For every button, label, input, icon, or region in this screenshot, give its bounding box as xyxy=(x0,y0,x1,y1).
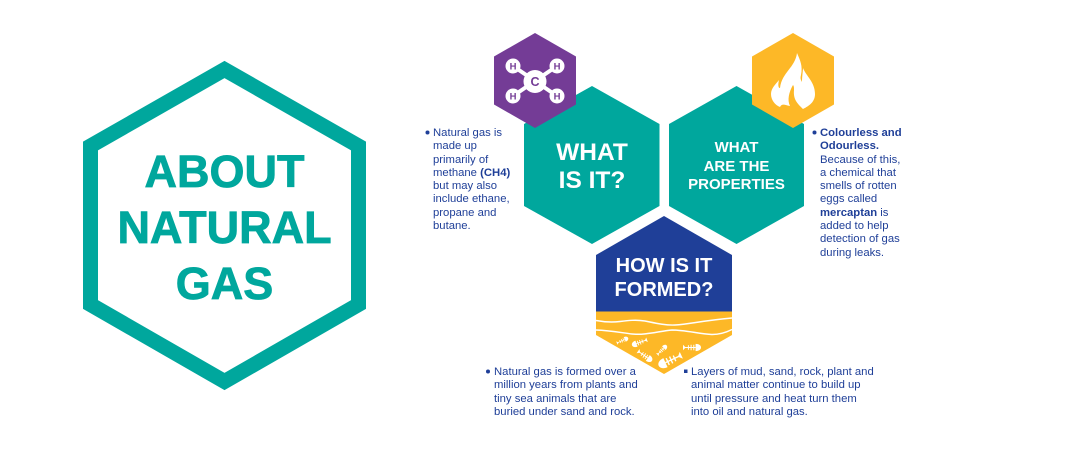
icon: methane molecule: H xyxy=(554,62,561,72)
text block: how formed right: until pressure and heat turn them xyxy=(691,393,857,405)
text block: properties: Odourless. xyxy=(820,140,879,152)
heading: properties: PROPERTIES xyxy=(688,176,785,193)
icon: methane molecule xyxy=(494,33,576,128)
text block: how formed left xyxy=(486,366,638,418)
text block: how formed left: tiny sea animals that are xyxy=(494,393,616,405)
text block: what is it: but may also xyxy=(433,180,497,192)
text block: how formed right: into oil and natural gas. xyxy=(691,406,808,418)
text block: properties: Because of this, xyxy=(820,154,900,166)
text block: properties: detection of gas xyxy=(820,233,900,245)
text block: properties: a chemical that xyxy=(820,167,897,179)
text block: what is it: include ethane, xyxy=(433,193,510,205)
icon: methane molecule: H xyxy=(554,92,561,102)
heading: what is it: WHAT xyxy=(556,139,628,166)
title: GAS xyxy=(176,258,273,309)
icon: methane molecule: C xyxy=(530,75,540,89)
text block: how formed left: buried under sand and rock. xyxy=(494,406,635,418)
title: NATURAL xyxy=(117,202,332,253)
text block: how formed right: Layers of mud, sand, rock, plant and xyxy=(691,366,874,378)
text block: how formed left: Natural gas is formed over a xyxy=(494,366,637,378)
text block: how formed right: animal matter continue to build up xyxy=(691,379,861,391)
text block: properties: during leaks. xyxy=(820,247,884,259)
text block: properties: eggs called xyxy=(820,193,877,205)
icon: methane molecule: H xyxy=(510,62,517,72)
icon: flame xyxy=(752,33,834,128)
text block: properties: Colourless and xyxy=(820,127,902,139)
text block: properties: is xyxy=(877,207,889,219)
heading: properties: WHAT xyxy=(715,139,758,156)
icon: methane molecule: H xyxy=(510,92,517,102)
text block: what is it: methane (CH4) xyxy=(433,167,510,179)
heading: how is it formed: HOW IS IT xyxy=(616,255,712,277)
text block: properties: added to help xyxy=(820,220,888,232)
text block: what is it: primarily of xyxy=(433,154,489,166)
panel: what is it hexagon xyxy=(524,86,660,244)
heading: what is it: IS IT? xyxy=(559,167,625,194)
panel: how is it formed hexagon xyxy=(596,216,732,374)
panel: properties hexagon xyxy=(669,86,804,244)
text block: what is it: Natural gas is xyxy=(433,127,502,139)
heading: properties: ARE THE xyxy=(704,158,769,175)
text block: what is it xyxy=(426,127,510,232)
text block: how formed left: million years from plants and xyxy=(494,379,638,391)
text block: what is it: butane. xyxy=(433,220,471,232)
heading: how is it formed: FORMED? xyxy=(615,279,713,301)
text block: what is it: made up xyxy=(433,140,477,152)
icon: sediment layers with fish fossils xyxy=(596,312,732,374)
text block: properties xyxy=(812,127,902,259)
text block: how formed right xyxy=(684,366,874,418)
text block: what is it: propane and xyxy=(433,207,496,219)
main title hexagon xyxy=(90,70,358,382)
text block: properties: mercaptan xyxy=(820,207,877,219)
text block: properties: smells of rotten xyxy=(820,180,897,192)
title: ABOUT xyxy=(145,146,304,197)
